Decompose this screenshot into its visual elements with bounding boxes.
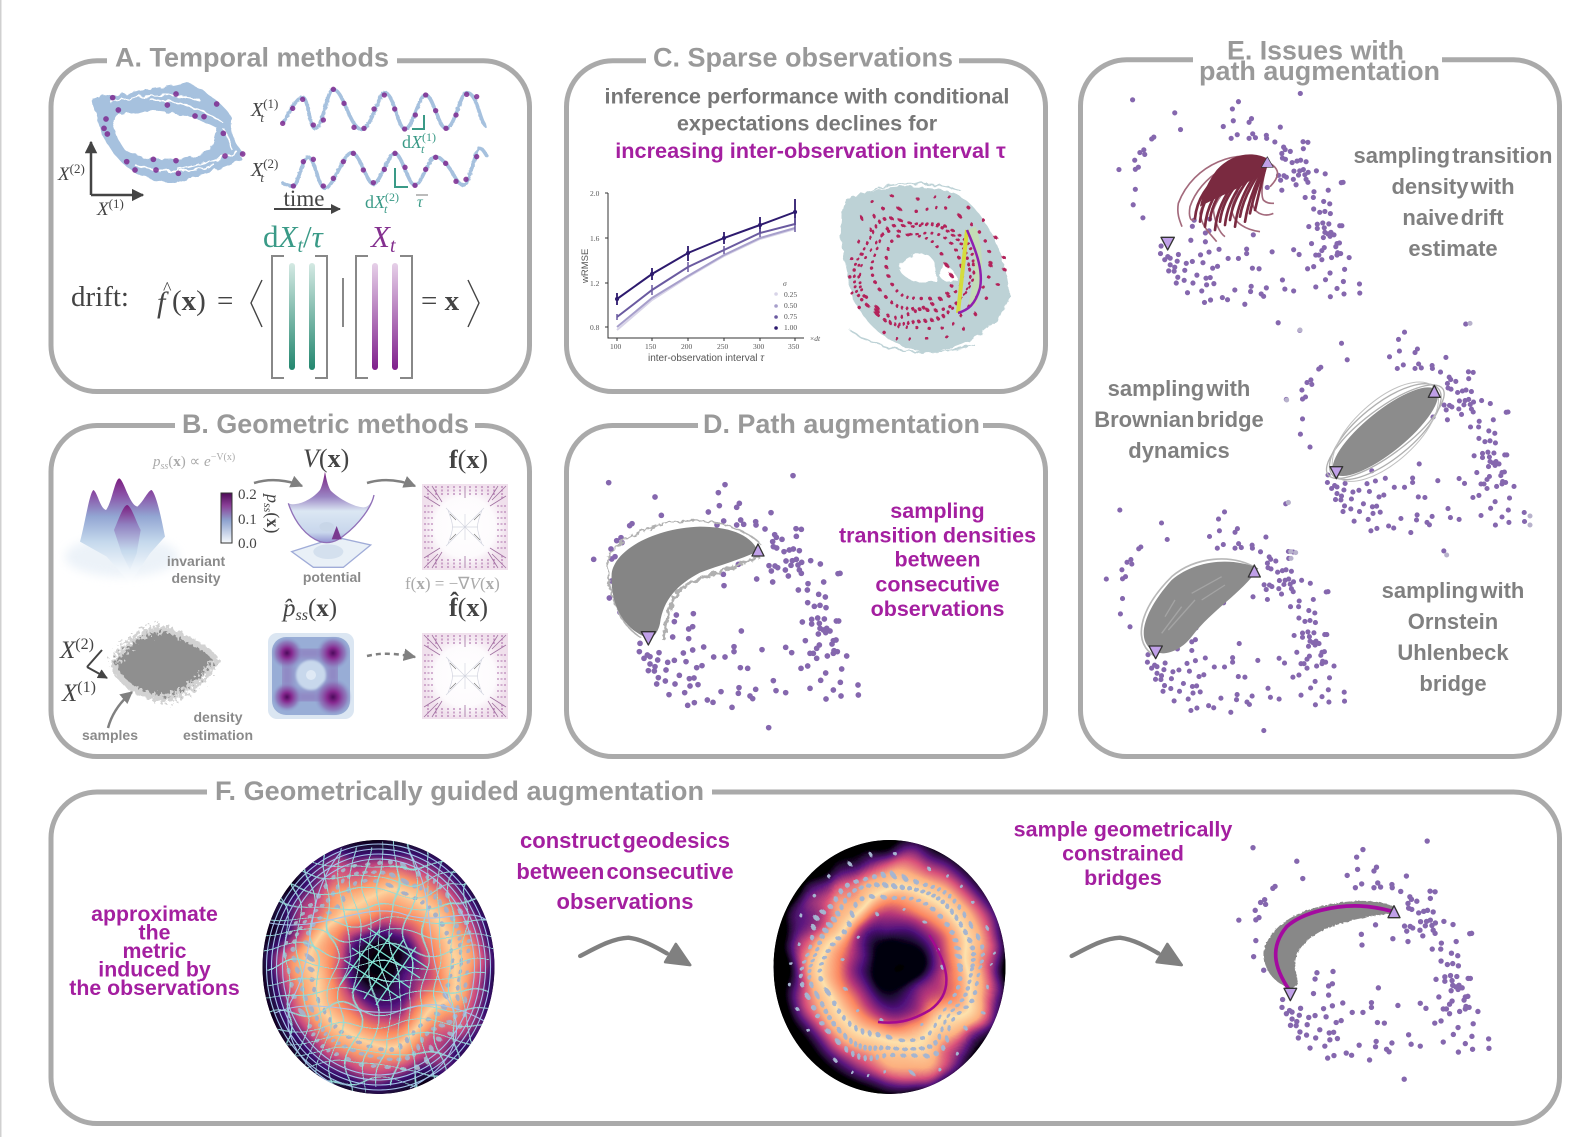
axes: X1 X2 (57, 142, 143, 220)
increments dX (teal): dX (365, 192, 385, 212)
time series X1 (250, 89, 487, 129)
colorbar: ( x ) (263, 512, 283, 533)
heading: A: A. Temporal methods (115, 42, 389, 72)
scatter: Brownian bridge (1094, 323, 1530, 555)
line chart wRMSE: 2.0 (590, 189, 600, 198)
drift equation: (x) (172, 285, 206, 317)
description: construct geodesics: construct geodesics (520, 828, 730, 853)
line chart wRMSE (580, 189, 821, 364)
description: density with (1391, 174, 1515, 199)
description text: expectations declines for (677, 110, 938, 136)
description: Uhlenbeck (1397, 640, 1509, 665)
increments dX (teal): (2) (385, 190, 399, 204)
line chart wRMSE: 0.8 (590, 323, 600, 332)
matrix dX/tau (263, 219, 327, 378)
equation: pss: p (152, 454, 161, 470)
description: approximate the metric: the observations (69, 976, 240, 1000)
colorbar: 0.2 (238, 487, 257, 503)
matrix X_t: t (390, 235, 396, 257)
line chart wRMSE: ×dt (810, 334, 821, 343)
colorbar (221, 487, 283, 552)
arrow 1 (580, 938, 690, 965)
label: invariant density: density (171, 570, 221, 586)
matrix dX/tau: / (303, 219, 312, 254)
time series X1: X (251, 99, 263, 121)
increments dX (teal): (1) (422, 130, 436, 144)
time series X2: X (251, 159, 263, 181)
drift equation: ^ (163, 278, 172, 298)
increments dX (teal): dX (402, 132, 422, 152)
line chart wRMSE: 250 (717, 342, 728, 351)
label: invariant density: invariant (167, 553, 225, 569)
V(x) label: V(x) (303, 444, 349, 473)
line chart wRMSE: 1.2 (590, 279, 600, 288)
description: sample bridges: sample geometrically (1014, 818, 1232, 842)
panel: C. Sparse observations (566, 42, 1046, 392)
increments dX (teal): τ (417, 194, 424, 211)
heading: E: E. Issues with (1227, 36, 1404, 66)
line chart wRMSE: 200 (681, 342, 692, 351)
pss hat label: ss (296, 607, 308, 624)
f(x) top heading: f(x) (449, 445, 488, 474)
description: consecutive (875, 572, 1000, 596)
pss hat label: p̂ (281, 595, 296, 622)
axes: X1 X2: (2) (70, 161, 85, 176)
drift equation (71, 278, 479, 327)
description: approximate the metric: approximate (91, 902, 218, 926)
heading: F: F. Geometrically guided augmentation (215, 776, 704, 806)
description: construct geodesics: observations (557, 889, 693, 914)
description: bridge (1419, 671, 1487, 696)
description: sample bridges: bridges (1084, 866, 1162, 890)
description: Ornstein (1408, 609, 1498, 634)
metric heatmap with grid (262, 840, 494, 1094)
description: estimate (1408, 236, 1498, 261)
heading: D: D. Path augmentation (703, 409, 980, 439)
description: sampling transition (1354, 143, 1552, 168)
scatter: OU bridge (1106, 503, 1524, 731)
panel: A. Temporal methods (51, 42, 530, 392)
scatter: guided bridges (1239, 841, 1489, 1079)
description: approximate the metric: the (139, 920, 171, 944)
description: naive drift (1402, 205, 1504, 230)
matrix dX/tau: t (297, 235, 303, 257)
colorbar: p (263, 492, 283, 503)
axes: X1 X2: X (97, 199, 109, 220)
matrix X_t (356, 219, 412, 378)
heading: E (1199, 36, 1440, 86)
triangle markers (1161, 157, 1273, 250)
axes: X1 X2: X (58, 164, 70, 185)
matrix X_t: X (371, 219, 390, 254)
faint outlier dots (1287, 323, 1530, 555)
colorbar: 0.0 (238, 536, 257, 552)
description text: increasing inter-observation interval τ (615, 138, 1006, 163)
samples axes: (2) (75, 636, 94, 653)
pss hat label: (x) (308, 595, 337, 622)
heading: E: path augmentation (1199, 56, 1440, 86)
arrow 2 (1072, 938, 1182, 965)
triangle markers (1149, 565, 1260, 659)
panel: E. Issues with path augmentation (1080, 36, 1560, 756)
time series X1: t (260, 110, 264, 125)
ring trajectory with observations (841, 183, 1010, 352)
triangle markers (1284, 906, 1400, 1001)
line chart wRMSE: wRMSE (580, 249, 591, 284)
increments dX (teal) (365, 115, 436, 216)
vector field bottom (422, 633, 508, 719)
description: approximate the metric: induced by (98, 958, 211, 982)
heading: B: B. Geometric methods (182, 409, 469, 439)
time series X1: (1) (263, 96, 278, 111)
grey bundle (1141, 559, 1258, 657)
drift equation: drift: (71, 281, 129, 313)
line chart wRMSE: 1.00 (784, 323, 797, 332)
arrows between top panels (254, 480, 415, 657)
colorbar: 0.1 (238, 512, 257, 528)
matrix dX/tau: dX (263, 219, 297, 254)
drift equation: = (217, 285, 233, 317)
fhat label: f̂(x) (449, 593, 488, 622)
description: sampling (890, 499, 985, 523)
increments dX (teal): t (421, 142, 425, 156)
faint outlier dots (1288, 503, 1296, 558)
panel: B. Geometric methods (51, 409, 530, 756)
potential surface (288, 472, 374, 567)
description: sampling with (1108, 376, 1250, 401)
grey ellipse bundle (1314, 365, 1456, 499)
line chart wRMSE: 350 (788, 342, 800, 351)
equation: pss: (x) ∝ e (168, 454, 211, 470)
scatter of observations (594, 476, 858, 728)
line chart wRMSE: inter-observation interval τ (648, 353, 765, 364)
red bundle (1178, 154, 1278, 242)
description text (605, 84, 1009, 163)
description: construct geodesics: between consecutive (516, 859, 734, 884)
description: observations (871, 597, 1004, 621)
samples axes: X (62, 680, 77, 707)
panel: F. Geometrically guided augmentation (51, 776, 1560, 1124)
sample cloud (110, 625, 220, 703)
line chart wRMSE: 0.50 (784, 301, 797, 310)
description: between (894, 548, 981, 572)
line chart wRMSE: 0.25 (784, 290, 797, 299)
samples axes (59, 636, 107, 707)
equation: f = -grad V: f(x) = −∇V(x) (405, 574, 500, 593)
drift equation: f (157, 286, 169, 319)
panel: D. Path augmentation (566, 409, 1046, 756)
equation: pss: ss (160, 461, 168, 472)
drift equation: = x (421, 285, 460, 317)
scatter: naive drift (1119, 93, 1552, 323)
samples label and arrow (82, 692, 138, 743)
geodesic heatmap (774, 840, 1006, 1094)
axes: X1 X2: (1) (109, 196, 124, 211)
estimated density heatmap (268, 633, 354, 719)
colorbar: ss (261, 503, 275, 513)
line chart wRMSE: 0.75 (784, 312, 797, 321)
label: density estimation: density (193, 709, 243, 725)
description: transition densities (839, 524, 1036, 548)
time series X2 (250, 148, 487, 188)
description text: inference performance with conditional (605, 84, 1009, 108)
samples axes: (1) (77, 679, 96, 696)
matrix dX/tau: τ (312, 219, 325, 254)
grey crescent bundle and purple geodesic (1264, 901, 1393, 990)
line chart wRMSE: σ (783, 279, 787, 288)
description: Brownian bridge (1094, 407, 1264, 432)
line chart wRMSE: 1.6 (590, 234, 600, 243)
increments dX (teal): t (384, 202, 388, 216)
time arrow (274, 186, 340, 211)
phase portrait ring (92, 82, 245, 183)
triangle markers (641, 544, 764, 645)
description: sample bridges: constrained (1062, 842, 1184, 866)
label: density estimation: estimation (183, 727, 253, 743)
time series X2: (2) (263, 156, 278, 171)
line chart wRMSE: 150 (645, 342, 656, 351)
description: approximate the metric: metric (123, 939, 187, 963)
heading: C: C. Sparse observations (653, 42, 953, 72)
label: potential: potential (303, 569, 361, 585)
triangle markers (1330, 385, 1440, 479)
samples label and arrow: samples (82, 727, 138, 743)
time arrow: time (284, 186, 324, 211)
vector field top (422, 484, 508, 570)
sampled path bundle (608, 521, 760, 640)
samples axes: X (60, 637, 75, 664)
line chart wRMSE: 300 (753, 342, 764, 351)
description: dynamics (1128, 438, 1230, 463)
time series X2: t (260, 170, 264, 185)
line chart wRMSE: 100 (610, 342, 622, 351)
invariant density surface (65, 478, 178, 583)
equation: pss: −V(x) (211, 452, 235, 463)
description: sampling with (1382, 578, 1524, 603)
